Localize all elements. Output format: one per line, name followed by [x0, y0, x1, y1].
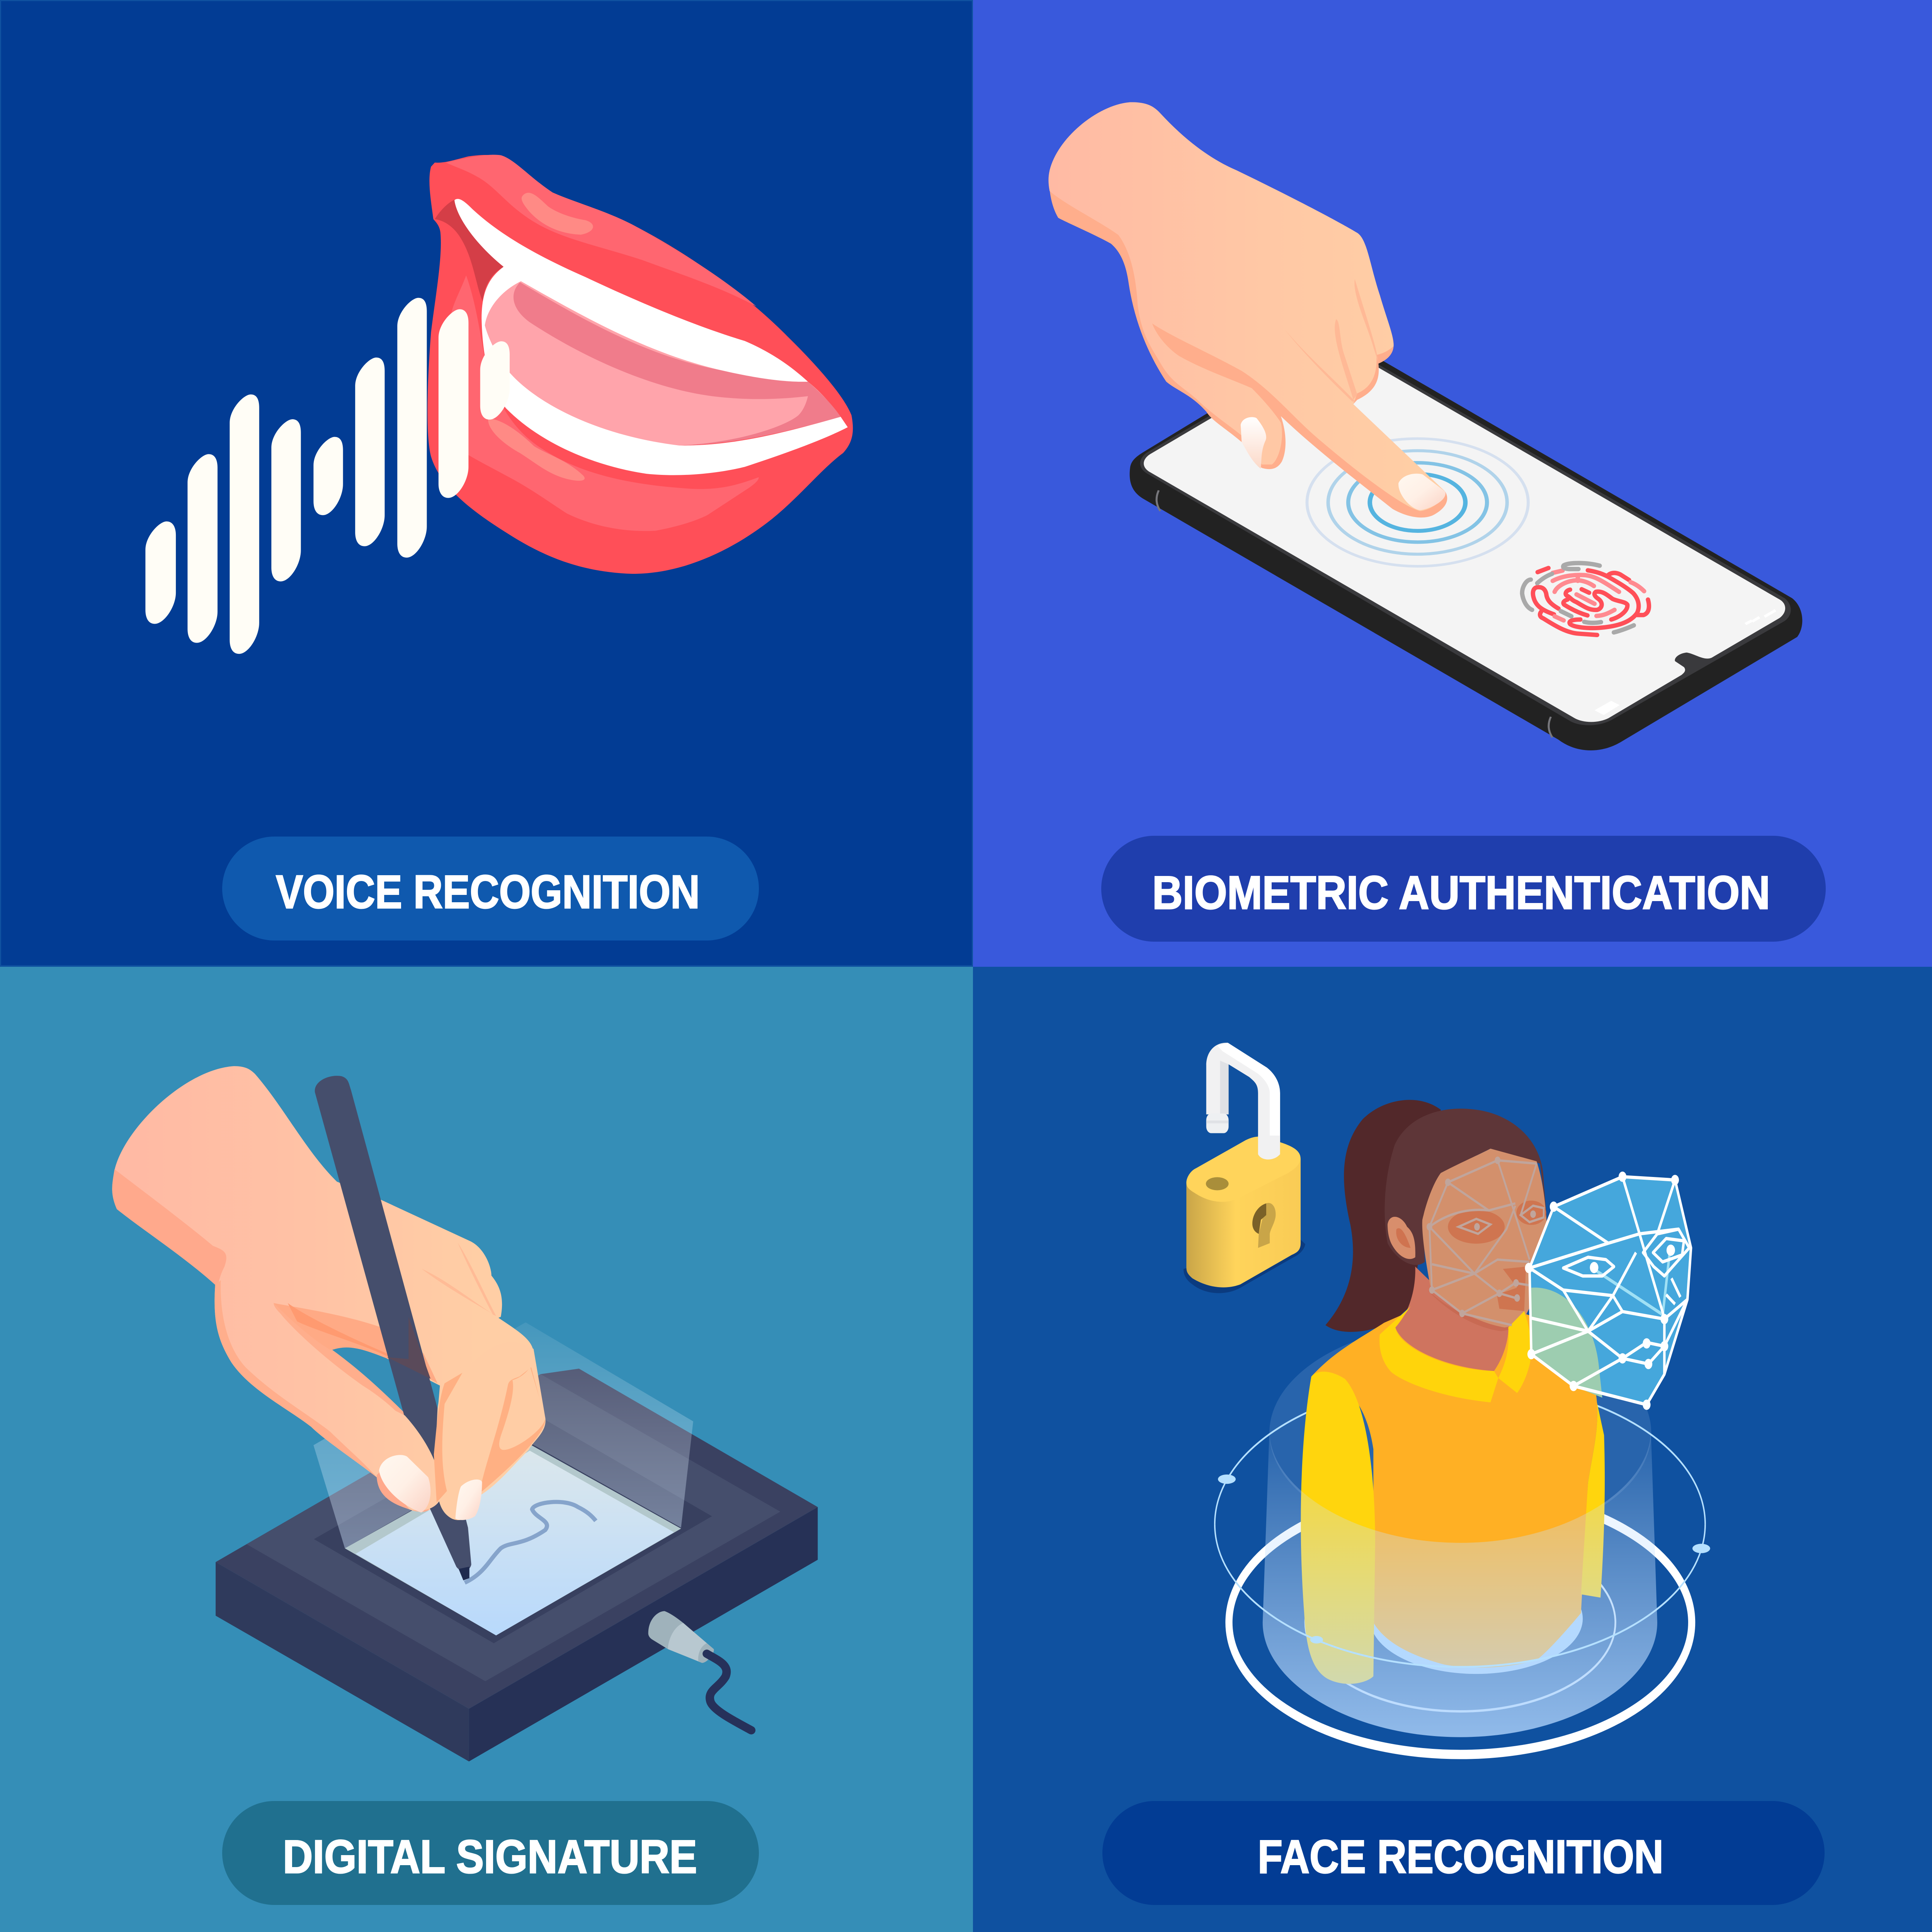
thumb and middle finger — [434, 1342, 545, 1520]
panel: digital signature — [0, 967, 973, 1932]
panel: voice recognition — [0, 0, 973, 967]
illustration: pointing hand — [1049, 102, 1447, 517]
label: biometric authentication: BIOMETRIC AUTHENTICATION — [1152, 866, 1770, 919]
face mesh overlay — [1427, 1156, 1544, 1325]
thick scanner ring — [1229, 1490, 1692, 1755]
illustration: face scan platform — [1184, 1043, 1710, 1755]
gap between fingers — [332, 1347, 440, 1413]
icon: fingerprint — [1522, 563, 1649, 635]
icon: open padlock — [1184, 1043, 1305, 1293]
icon: touch rings — [1307, 439, 1528, 566]
label: face recognition: FACE RECOGNITION — [1258, 1830, 1663, 1883]
pill: biometric authentication — [1101, 836, 1826, 942]
stylus pen — [315, 1076, 471, 1580]
label: voice recognition: VOICE RECOGNITION — [276, 866, 700, 918]
label: digital signature: DIGITAL SIGNATURE — [283, 1830, 697, 1883]
orbit ring lower arc with nodes — [1215, 1475, 1710, 1667]
signature stroke — [465, 1502, 596, 1583]
inner thin ring — [1305, 1534, 1616, 1711]
panel: biometric authentication — [973, 0, 1932, 967]
cylinder top glow — [1269, 1323, 1651, 1543]
index finger — [363, 1408, 442, 1510]
connector plug and cable — [648, 1611, 751, 1730]
pill: digital signature — [222, 1801, 759, 1905]
icon: status indicators — [1745, 610, 1776, 624]
platform disk glow — [1370, 1563, 1583, 1674]
panel: face recognition — [973, 967, 1932, 1932]
icon: sound wave bars — [145, 298, 510, 654]
illustration: smartphone with touch — [1130, 334, 1802, 750]
person — [1301, 1100, 1605, 1684]
pill: face recognition — [1102, 1801, 1825, 1905]
orbit ring upper arc — [1215, 1381, 1705, 1524]
icon: blue 3D face scan mask — [1525, 1172, 1691, 1410]
pill: voice recognition — [222, 837, 759, 940]
illustration: open mouth — [427, 155, 853, 574]
illustration: signing tablet — [216, 1322, 818, 1762]
glass cylinder wall — [1263, 1430, 1657, 1737]
illustration: writing hand with pen — [112, 1066, 546, 1580]
hologram glass plane — [313, 1322, 693, 1548]
finger nails — [379, 1455, 482, 1520]
